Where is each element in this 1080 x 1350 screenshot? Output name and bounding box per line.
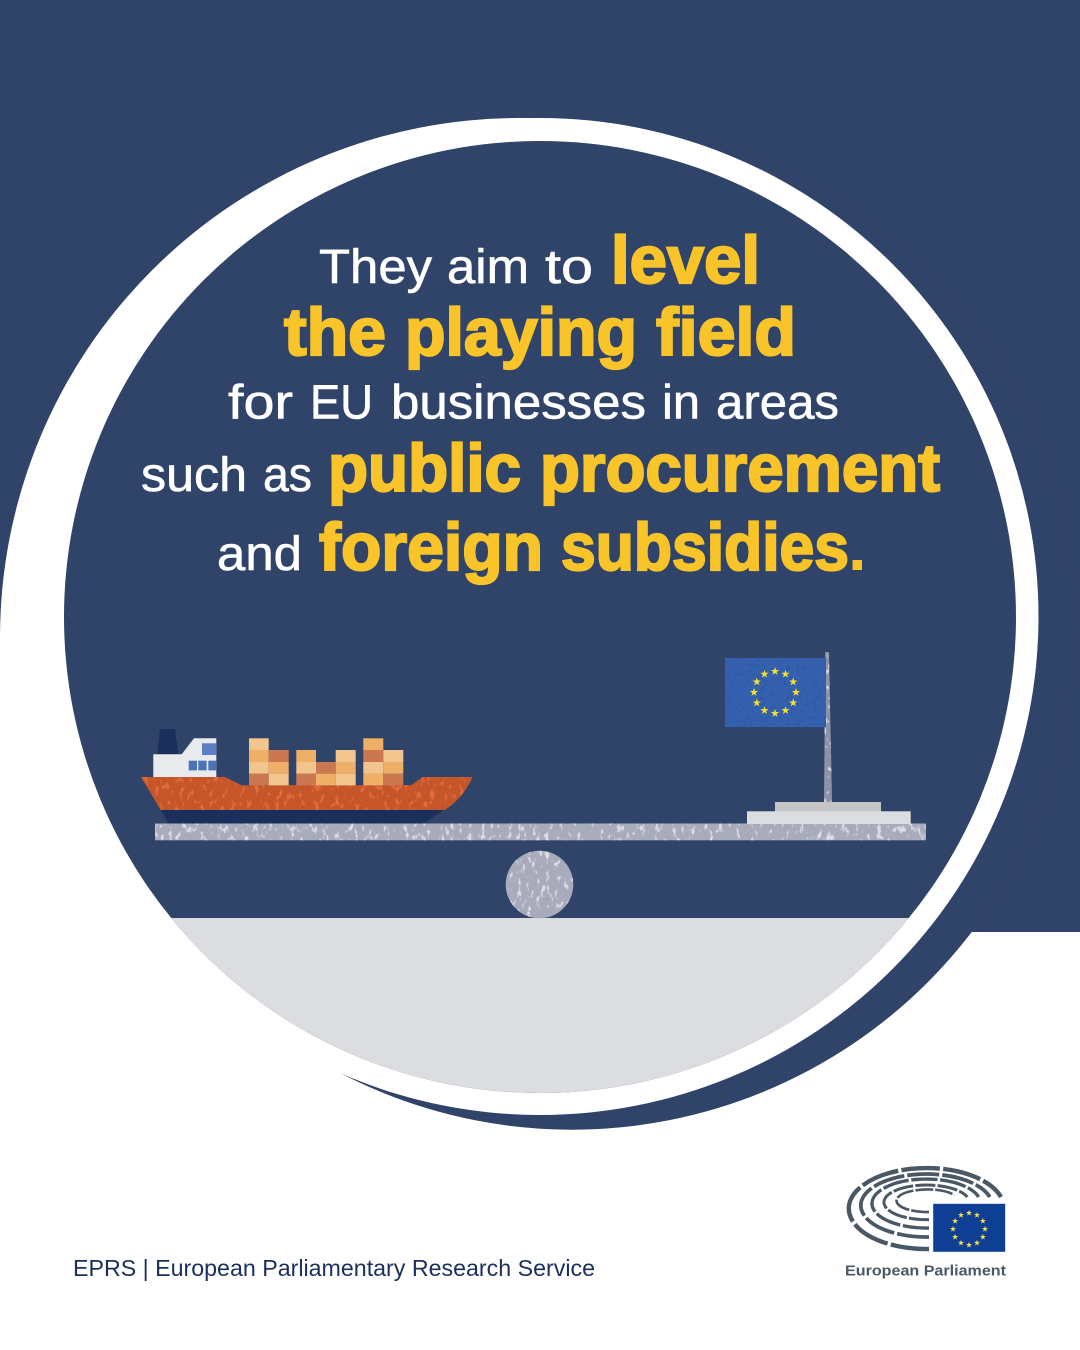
headline text: aim <box>447 241 529 294</box>
fulcrum ball <box>506 851 573 918</box>
icon: EU flag on plinth <box>725 652 911 824</box>
headline text: playing <box>405 295 637 370</box>
ship keel <box>161 809 445 824</box>
logo hemicycle <box>849 1168 1001 1249</box>
plinth upper step <box>775 802 881 812</box>
headline text: field <box>656 295 796 370</box>
headline text: procurement <box>540 431 940 506</box>
ship hull <box>141 777 473 810</box>
headline text: for <box>228 376 293 430</box>
headline text: businesses <box>391 376 646 430</box>
logo stars <box>950 1210 988 1248</box>
panel: inner navy circle with grey ground <box>60 141 1020 1098</box>
headline text: EU <box>310 376 373 430</box>
headline text: in <box>662 376 700 430</box>
flag stars <box>750 667 800 717</box>
footer credit: EPRS | European Parliamentary Research Service <box>73 1255 595 1281</box>
headline text: such <box>141 449 247 502</box>
cargo containers <box>249 738 403 785</box>
headline text: subsidies <box>561 510 849 585</box>
headline text: and <box>217 528 302 581</box>
flag pole <box>824 652 832 802</box>
logo wordmark: European Parliament <box>845 1262 1006 1280</box>
icon: container ship <box>141 729 473 824</box>
balance beam <box>155 824 926 840</box>
logo: European Parliament <box>845 1168 1006 1280</box>
ship funnel <box>157 729 178 754</box>
ship bridge <box>153 738 216 777</box>
headline text: public <box>328 431 521 506</box>
logo flag <box>933 1203 1006 1252</box>
flag cloth <box>725 658 826 727</box>
headline text: . <box>848 510 867 585</box>
plinth lower step <box>747 811 911 824</box>
headline text: the <box>284 295 386 370</box>
headline text: They <box>319 241 432 294</box>
headline text: foreign <box>319 510 543 585</box>
headline text <box>141 223 940 585</box>
bridge windows <box>189 743 216 770</box>
headline text: level <box>611 223 760 298</box>
headline text: to <box>545 241 593 294</box>
headline text: as <box>263 449 312 502</box>
headline text: areas <box>716 376 839 430</box>
